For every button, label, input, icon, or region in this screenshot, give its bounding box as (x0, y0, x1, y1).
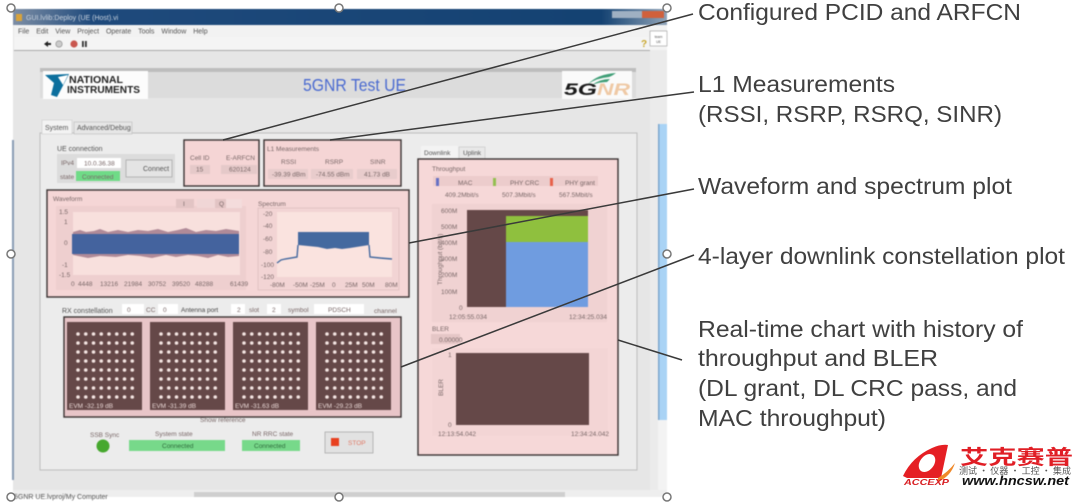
leader line: L1 measurements (330, 92, 694, 140)
throughput chart: 400M (441, 240, 457, 247)
throughput chart (432, 204, 607, 322)
spectrum plot: 25M (345, 282, 358, 289)
panel: L1 measurements: -74.55 dBm (316, 172, 350, 178)
panel: throughput and BLER: Throughput (432, 166, 465, 173)
RX constellation controls: 0 (127, 307, 131, 314)
waveform plot: Q (219, 201, 224, 208)
window frame (13, 9, 667, 497)
title bar (13, 9, 667, 25)
RX constellation controls: CC (146, 307, 156, 314)
caption: L1 measurements (698, 71, 1002, 127)
spectrum plot: -25M (310, 282, 325, 289)
waveform plot: 1 (64, 219, 68, 226)
5G NR logo: 5G (564, 80, 597, 99)
BLER readout: 0.00000 (439, 337, 463, 344)
throughput legend: PHY grant (565, 180, 595, 187)
constellation 1: EVM -32.19 dB (69, 403, 113, 410)
RX constellation controls: symbol (288, 307, 309, 314)
tabbed panel: Advanced/Debug (77, 125, 131, 132)
constellation 2: EVM -31.39 dB (152, 403, 196, 410)
spectrum plot: -120 (261, 274, 274, 281)
constellation 3 (233, 322, 308, 410)
caption: constellation: 4-layer downlink constellation plot (698, 243, 1065, 269)
vertical scrollbar (650, 50, 667, 497)
UE connection controls: state (60, 174, 74, 181)
tagline: 测试 · 仪器 · 工控 · 集成 (959, 464, 1071, 477)
National Instruments logo: NATIONAL (69, 75, 123, 86)
spectrum plot (258, 201, 399, 290)
RX constellation controls: 2 (272, 307, 276, 314)
throughput chart: 500M (441, 224, 457, 231)
panel: throughput and BLER (418, 159, 618, 455)
RX constellation controls: RX constellation (62, 308, 113, 315)
throughput legend: 507.3Mbit/s (502, 192, 536, 199)
toolbar: ? (641, 39, 647, 50)
throughput chart: Throughput (bit/s) (437, 234, 444, 285)
panel: cell ID and ARFCN: Cell ID (190, 155, 210, 162)
heading: 5GNR Test UE: 5GNR Test UE (303, 75, 406, 95)
waveform plot: 0 (64, 240, 68, 247)
caption: L1 measurements: L1 Measurements (698, 71, 895, 97)
watermark logo: Accexp: ACCEXP (903, 477, 949, 487)
throughput chart: 200M (441, 272, 457, 279)
leader line: real-time chart (618, 340, 682, 360)
waveform plot: 1.5 (59, 209, 68, 216)
UE connection controls (57, 146, 175, 183)
waveform plot (53, 196, 248, 290)
spectrum plot: -50M (293, 282, 308, 289)
brand name: 艾克赛普 (960, 441, 1073, 470)
status bar and horizontal scrollbar (13, 490, 667, 501)
waveform plot: 13216 (100, 281, 118, 288)
NR RRC state: Connected (254, 443, 286, 450)
UE connection controls: Connected (82, 174, 114, 181)
leader line: constellation (401, 255, 694, 367)
constellation 4 (316, 322, 391, 410)
throughput legend: MAC (458, 180, 473, 187)
BLER readout: BLER (432, 326, 449, 333)
caption: L1 measurements: (RSSI, RSRP, RSRQ, SINR) (698, 101, 1002, 127)
throughput legend: PHY CRC (510, 180, 539, 187)
waveform plot: 39520 (172, 281, 190, 288)
waveform plot: Waveform (53, 196, 82, 203)
RX constellation controls: channel (374, 308, 397, 315)
tabs: downlink and uplink: Uplink (463, 150, 482, 157)
RX constellation controls: PDSCH (328, 307, 351, 314)
constellation 1 (67, 322, 142, 410)
selection handles (7, 4, 671, 501)
spectrum plot: -80 (263, 249, 273, 256)
throughput chart: 12:05:55.034 (449, 314, 487, 321)
application window screenshot (12, 9, 667, 501)
menu bar: File Edit View Project Operate Tools Window Help (18, 28, 208, 36)
panel: L1 measurements: -39.39 dBm (272, 172, 306, 178)
throughput chart: 600M (441, 208, 457, 215)
caption: real-time chart: Real-time chart with history of (698, 316, 1023, 342)
5G NR logo (562, 71, 632, 99)
BLER chart: 0 (448, 422, 452, 429)
spectrum plot: 80M (385, 282, 398, 289)
spectrum plot: -100 (261, 262, 274, 269)
panel: L1 measurements: L1 Measurements (267, 146, 320, 153)
spectrum plot: 0 (332, 282, 336, 289)
website: www.hncsw.net (962, 473, 1070, 488)
caption: real-time chart: (DL grant, DL CRC pass, and (698, 375, 1017, 401)
RX constellation controls: slot (249, 307, 259, 314)
caption: real-time chart: MAC throughput) (698, 405, 886, 431)
waveform plot: -1.5 (59, 272, 71, 279)
menu bar (14, 25, 667, 37)
throughput chart: 12:34:25.034 (569, 314, 607, 321)
BLER readout (431, 326, 463, 344)
UE connection controls: Connect (143, 166, 169, 173)
SSB sync indicator: SSB Sync (90, 432, 120, 439)
caption: real-time chart (698, 316, 1023, 431)
National Instruments logo (43, 71, 148, 99)
stop button (325, 432, 373, 453)
RX constellation controls (62, 304, 397, 315)
RX constellation controls: 2 (237, 307, 241, 314)
system state: System state (155, 431, 193, 438)
RX constellation controls: 0 (163, 307, 167, 314)
panel: constellation plots (64, 317, 401, 417)
toolbar (14, 31, 667, 51)
spectrum plot: 50M (362, 282, 375, 289)
5G NR logo: NR (597, 80, 631, 99)
system state (129, 431, 225, 451)
SSB sync indicator (90, 432, 120, 452)
status bar and horizontal scrollbar: 5GNR UE.lvproj/My Computer (14, 494, 108, 501)
caption: waveform and spectrum: Waveform and spectrum plot (698, 173, 1012, 199)
throughput chart: 300M (441, 256, 457, 263)
panel: cell ID and ARFCN: E-ARFCN (226, 155, 255, 162)
throughput chart: 0 (459, 305, 463, 312)
throughput legend: 409.2Mbit/s (445, 192, 479, 199)
stop button: STOP (348, 440, 366, 447)
throughput legend: 567.5Mbit/s (559, 192, 593, 199)
waveform plot: 61439 (230, 281, 248, 288)
tabbed panel (40, 120, 637, 470)
panel: L1 measurements (264, 140, 401, 186)
caption: real-time chart: throughput and BLER (698, 345, 938, 371)
spectrum plot: -40 (263, 223, 273, 230)
BLER chart: 1 (448, 352, 452, 359)
left edge bar (12, 140, 14, 480)
watermark logo: Accexp (903, 441, 1073, 488)
spectrum plot: -60 (263, 236, 273, 243)
toolbar: team (655, 35, 662, 39)
icon: red A swoosh (903, 445, 955, 482)
waveform plot: I (183, 201, 185, 208)
waveform plot: 0 (71, 281, 75, 288)
National Instruments logo: INSTRUMENTS (67, 85, 140, 96)
leader line: PCID and ARFCN (223, 14, 693, 140)
leader line: waveform (409, 189, 694, 243)
banner strip (40, 68, 636, 98)
UE connection controls: UE connection (57, 146, 103, 153)
constellation 3: EVM -31.63 dB (235, 403, 279, 410)
waveform plot: 48288 (195, 281, 213, 288)
waveform plot: -1 (62, 262, 68, 269)
spectrum plot: -20 (263, 211, 273, 218)
BLER chart: BLER (438, 379, 445, 396)
NR RRC state: NR RRC state (252, 431, 294, 438)
tabs: downlink and uplink (421, 146, 485, 159)
panel: cell ID and ARFCN: 15 (196, 166, 204, 174)
BLER chart (432, 348, 609, 438)
waveform plot: 30752 (148, 281, 166, 288)
constellation 4: EVM -29.23 dB (318, 403, 362, 410)
panel: L1 measurements: RSSI (281, 159, 296, 166)
panel: L1 measurements: RSRP (325, 159, 343, 166)
constellation 2 (150, 322, 225, 410)
spectrum plot: -80M (270, 282, 285, 289)
BLER chart: 12:13:54.042 (438, 431, 476, 438)
toolbar: UE (656, 40, 662, 44)
panel: waveform and spectrum (47, 190, 409, 297)
title bar: GUI.lvlib:Deploy (UE (Host).vi (26, 15, 119, 22)
spectrum plot: Spectrum (258, 201, 286, 208)
waveform plot: 4448 (78, 281, 93, 288)
panel: L1 measurements: 41.73 dB (364, 172, 390, 178)
BLER chart: 12:34:24.042 (571, 431, 609, 438)
UE connection controls: IPv4 (61, 160, 74, 167)
tabbed panel: System (45, 125, 69, 132)
show reference checkbox: Show reference (200, 417, 246, 424)
throughput chart: 100M (441, 289, 457, 296)
waveform plot: 21984 (124, 281, 142, 288)
panel: L1 measurements: SINR (370, 159, 386, 166)
RX constellation controls: Antenna port (181, 307, 218, 314)
panel: cell ID and ARFCN: 620124 (229, 166, 251, 174)
NR RRC state (242, 431, 300, 451)
UE connection controls: 10.0.36.38 (84, 160, 115, 168)
panel: cell ID and ARFCN (184, 140, 259, 186)
tabs: downlink and uplink: Downlink (424, 150, 451, 157)
throughput legend (433, 176, 598, 199)
system state: Connected (162, 443, 194, 450)
